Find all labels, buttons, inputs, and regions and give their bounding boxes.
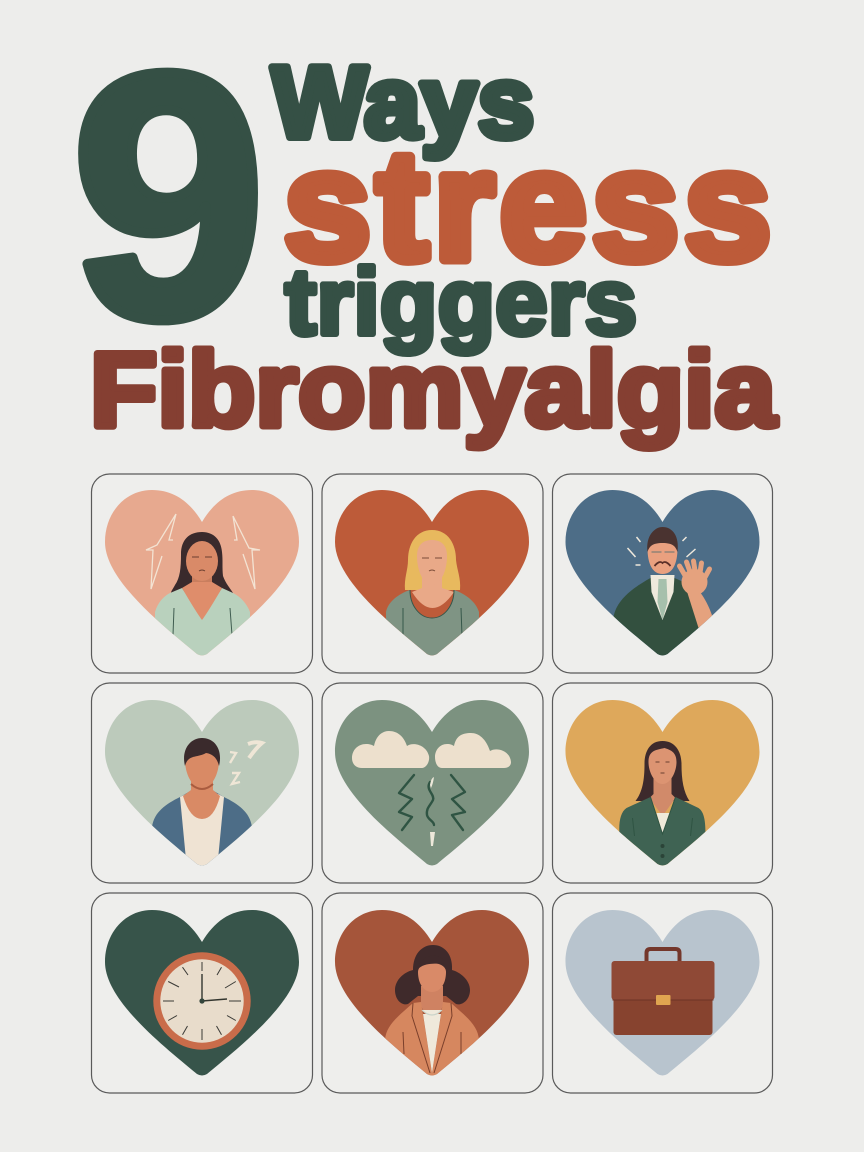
panel 6: woman in green jacket [552, 683, 772, 883]
woman figure [386, 530, 479, 660]
man figure [614, 527, 712, 660]
handle [646, 949, 680, 962]
lightning squiggles [399, 775, 465, 830]
heart [566, 700, 760, 866]
numeral 9: 9 [71, 1, 266, 392]
case body [614, 998, 712, 1035]
clock ticks [163, 962, 241, 1040]
woman figure [385, 945, 479, 1080]
heart [335, 490, 529, 656]
stress marks [628, 537, 696, 565]
heart [105, 910, 299, 1076]
panel 9: briefcase [552, 893, 772, 1093]
panel 7: clock [92, 893, 312, 1093]
heading: triggers: triggers [285, 249, 637, 354]
heart [335, 700, 529, 866]
card frame [92, 893, 312, 1093]
card frame [322, 893, 543, 1093]
panel 3: man with raised hand [552, 474, 772, 673]
light sparks [430, 777, 435, 846]
heading: Ways: Ways [272, 47, 534, 159]
heart [335, 910, 529, 1076]
clock rim [153, 952, 251, 1050]
card frame [552, 683, 772, 883]
man figure [152, 738, 252, 870]
case flap [612, 961, 714, 1000]
title [71, 1, 777, 449]
small squiggles [230, 752, 240, 784]
heading: stress: stress [284, 119, 771, 293]
heart [105, 700, 299, 866]
seam [612, 999, 714, 1001]
briefcase [612, 949, 714, 1035]
card frame [552, 474, 772, 673]
heart [566, 910, 760, 1076]
woman figure [619, 741, 706, 870]
clasp [656, 995, 670, 1005]
card frame [92, 683, 312, 883]
heart [105, 490, 299, 656]
clock [153, 952, 251, 1050]
panel 5: storm clouds and lightning [322, 683, 543, 883]
panel 4: man with racing thoughts [92, 683, 312, 883]
panel 8: woman in coral jacket [322, 893, 543, 1093]
clouds [352, 731, 511, 768]
heart [566, 490, 760, 656]
panel 1: woman with pain bolts [92, 474, 312, 673]
card frame [322, 683, 543, 883]
thought squiggles [248, 742, 262, 758]
card frame [322, 474, 543, 673]
clock face [160, 959, 244, 1043]
card frame [552, 893, 772, 1093]
woman figure [155, 532, 250, 660]
panel 2: blonde woman [322, 474, 543, 673]
clock hands [202, 974, 227, 1001]
heading: Fibromyalgia: Fibromyalgia [90, 331, 777, 449]
card frame [92, 474, 312, 673]
pain bolts [146, 514, 260, 589]
